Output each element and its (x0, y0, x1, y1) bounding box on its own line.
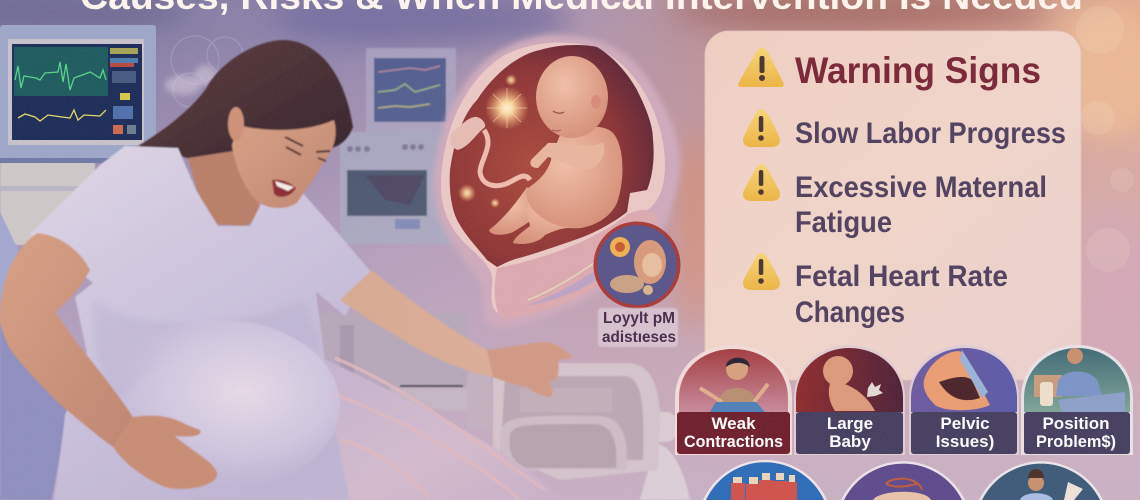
card: position problems: Problem$) (1036, 432, 1116, 451)
warning: slow labor progress: Slow Labor Progress (795, 117, 1066, 150)
doctor (1020, 469, 1083, 500)
callout caption: adistıeses (602, 329, 676, 346)
badge: anatomy (841, 461, 965, 500)
icon: warning triangle 3 (743, 253, 780, 290)
ear (228, 107, 244, 141)
warning: fetal heart rate changes: Changes (795, 296, 905, 329)
icon: warning triangle 1 (743, 109, 780, 147)
bottles (731, 473, 797, 500)
blanket (300, 357, 562, 500)
belly (100, 320, 340, 490)
warning: excessive maternal fatigue: Excessive Maternal (795, 171, 1047, 204)
callout caption: Loyylt pM (603, 310, 675, 327)
right background monitors (340, 48, 456, 244)
arm (530, 142, 605, 169)
eyes and brows (285, 137, 330, 161)
child illustration (700, 358, 768, 412)
inner pink band (441, 43, 665, 313)
shirt (30, 146, 371, 500)
fetus illustration (823, 356, 875, 411)
outer uterus wall (433, 35, 680, 328)
right hand (487, 342, 573, 397)
torso (527, 127, 622, 228)
card: pelvic issues (909, 345, 1019, 455)
icon: warning triangle 2 (743, 164, 780, 201)
right arm (340, 270, 493, 377)
left hand (113, 415, 217, 489)
card: weak contractions (675, 345, 792, 455)
near leg (513, 190, 615, 244)
callout circle: placental and fetal tissues (594, 222, 680, 308)
heading: warning signs: Warning Signs (795, 50, 1041, 91)
far leg (489, 187, 545, 235)
face (232, 120, 336, 208)
card: position problems: Position (1042, 414, 1110, 433)
warning: excessive maternal fatigue: Fatigue (795, 206, 892, 239)
hair (138, 40, 353, 166)
shirt shading (94, 300, 320, 400)
warning: excessive maternal fatigue (795, 171, 1047, 239)
icon: warning triangle heading (738, 48, 784, 87)
placenta and umbilical cord (450, 117, 485, 150)
card: large baby: Large (827, 414, 873, 433)
green heart trace (15, 62, 106, 90)
neck (188, 150, 262, 226)
fetus (489, 56, 622, 244)
left patient monitor (0, 25, 156, 163)
badge: fluids (703, 460, 827, 500)
left arm (0, 233, 133, 447)
light glow (485, 86, 529, 130)
pelvis illustration (924, 350, 990, 410)
card: large baby (794, 345, 905, 455)
fetus face (553, 111, 564, 113)
lower-left wall and bedding (0, 160, 95, 500)
yellow trace (18, 110, 106, 121)
uterus with fetus (433, 35, 680, 328)
panel: warning signs (705, 31, 1081, 380)
card: weak contractions: Weak (711, 414, 756, 433)
mouth (272, 180, 296, 197)
badge: clinician (979, 461, 1103, 500)
card: weak contractions: Contractions (684, 432, 783, 451)
card: position problems (1021, 345, 1133, 455)
head (536, 56, 608, 138)
sparkle (867, 382, 883, 397)
card: large baby: Baby (829, 432, 871, 451)
patient (0, 40, 573, 500)
card: pelvic issues: Pelvic (940, 414, 990, 433)
warning: fetal heart rate changes: Fetal Heart Rate (795, 260, 1008, 293)
callout caption (598, 308, 678, 347)
amniotic sac (450, 45, 654, 267)
warning: fetal heart rate changes (795, 260, 1008, 329)
head (873, 492, 931, 500)
lower fold (495, 210, 658, 319)
monitor buttons (110, 48, 138, 134)
card: pelvic issues: Issues) (936, 432, 994, 451)
bed rail and equipment (320, 313, 690, 500)
clinician illustration (1034, 348, 1125, 412)
